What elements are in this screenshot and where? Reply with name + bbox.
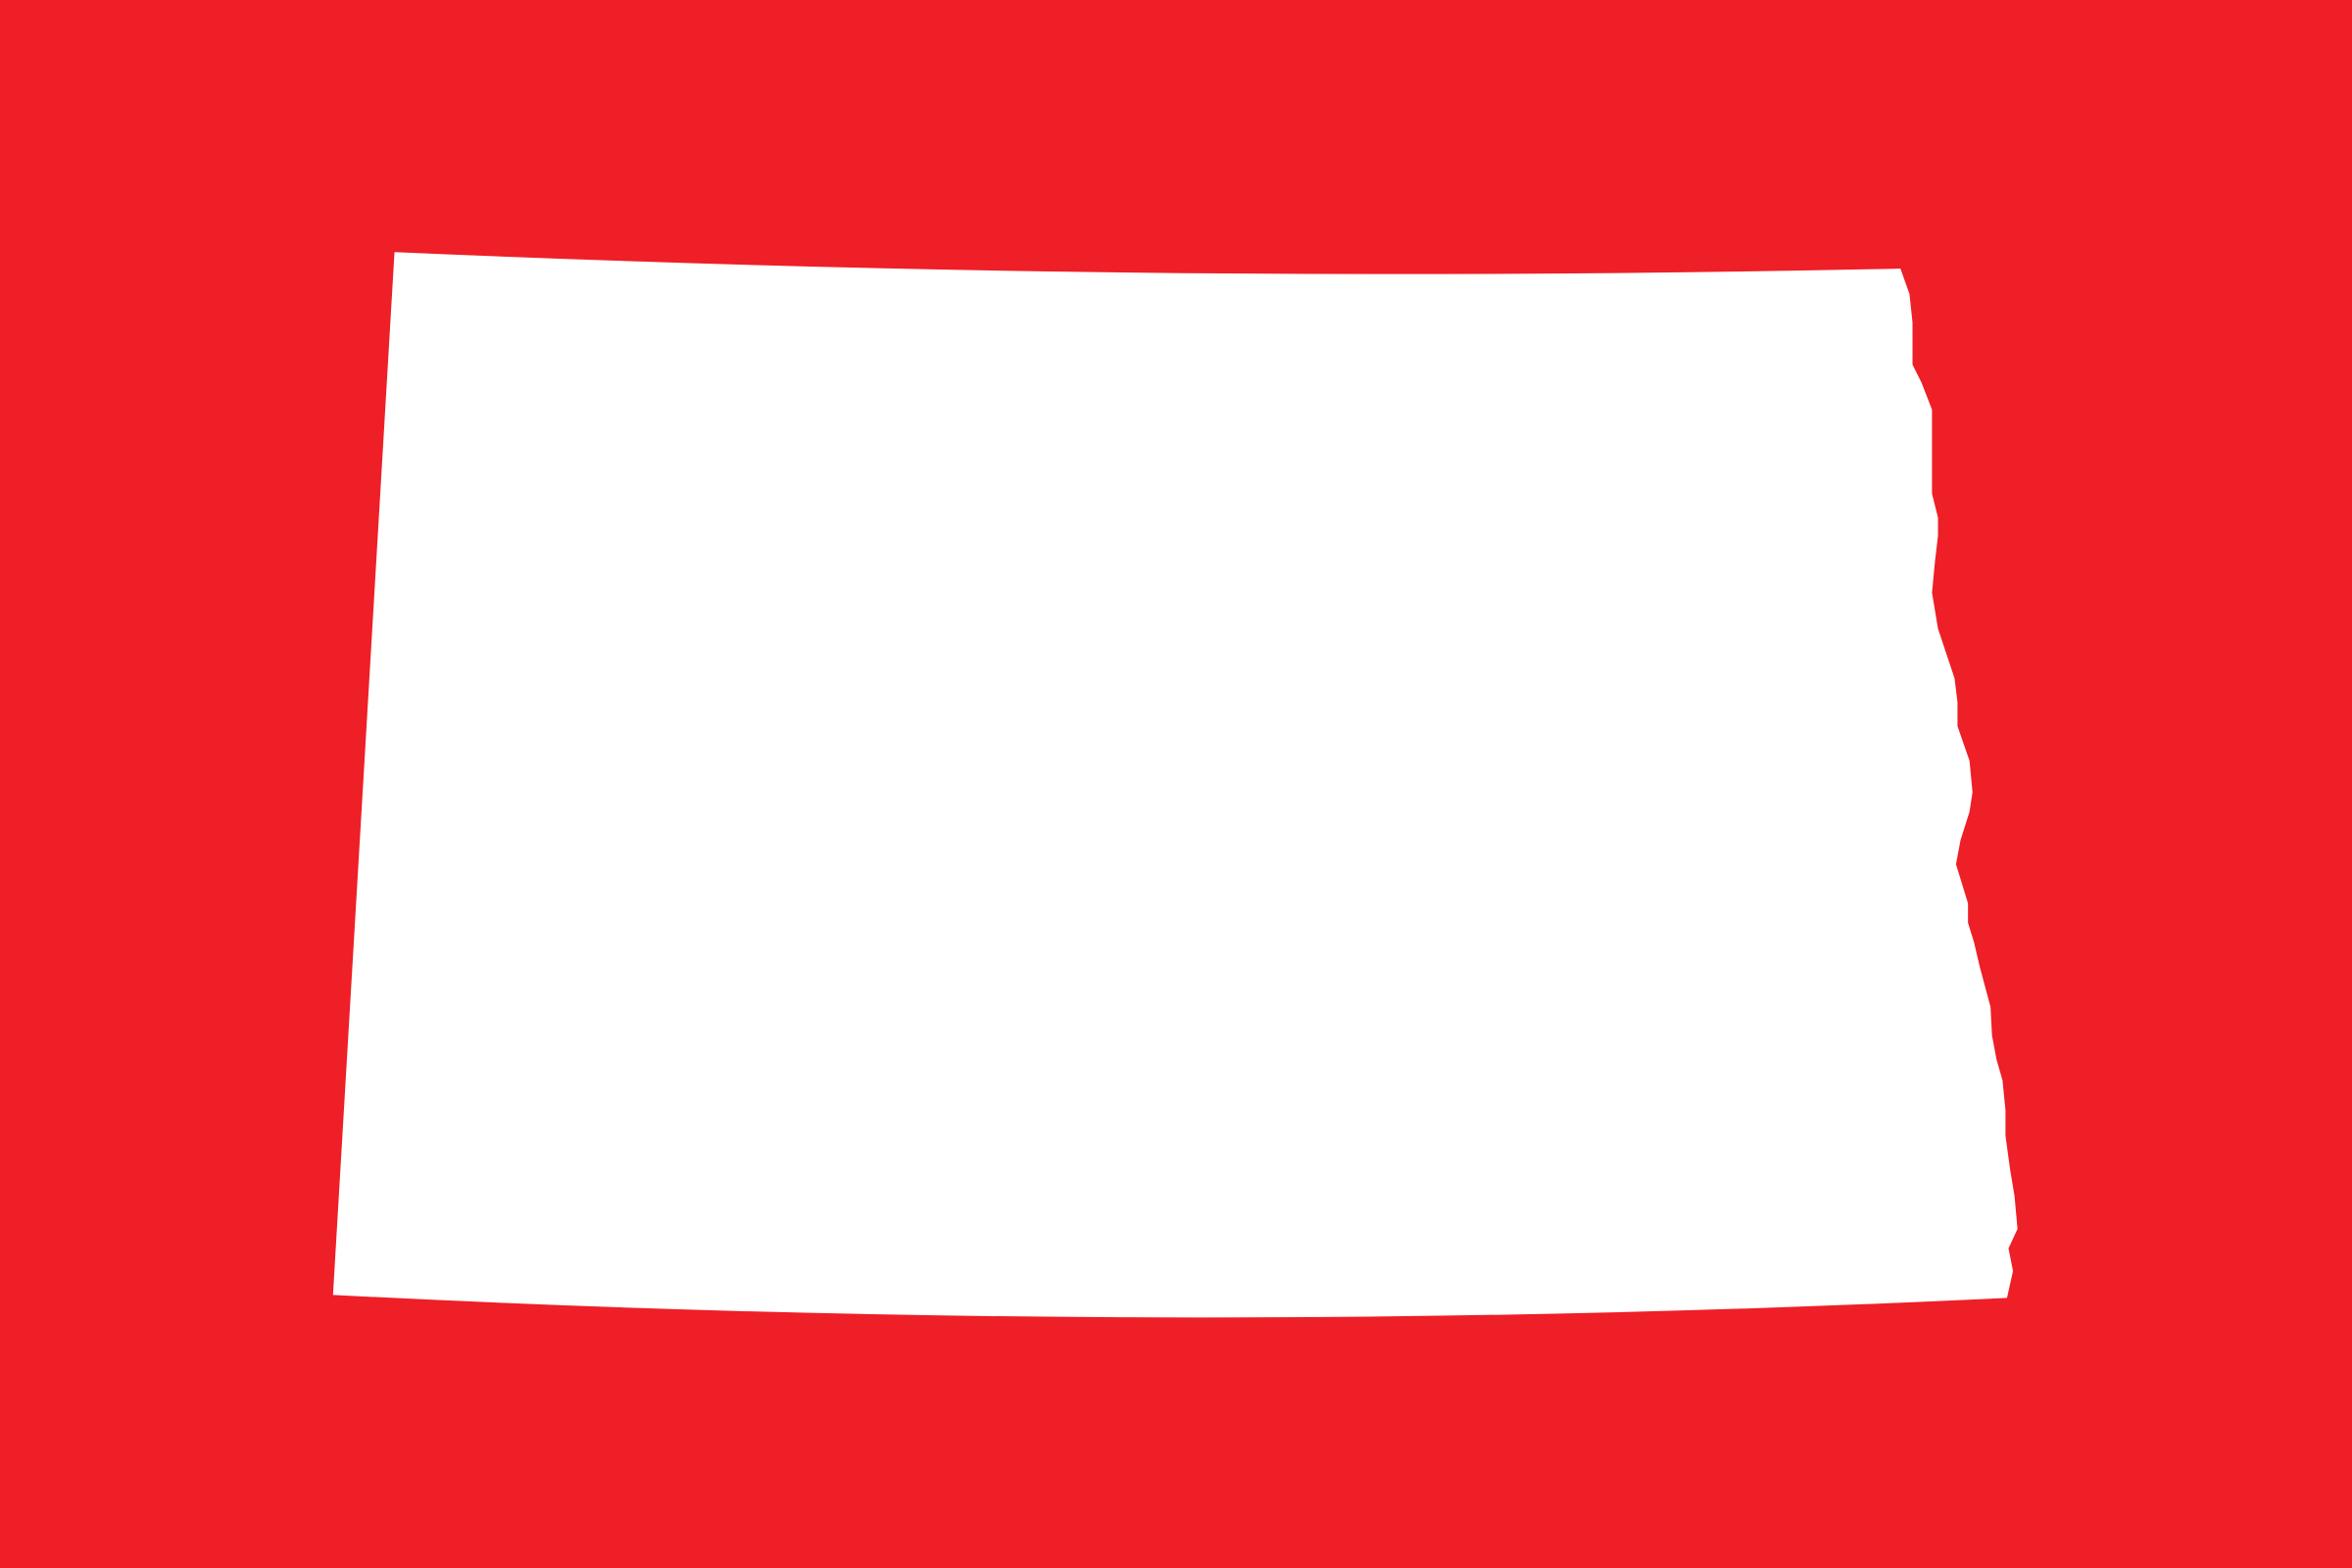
state shape: North Dakota — [333, 252, 2018, 1317]
